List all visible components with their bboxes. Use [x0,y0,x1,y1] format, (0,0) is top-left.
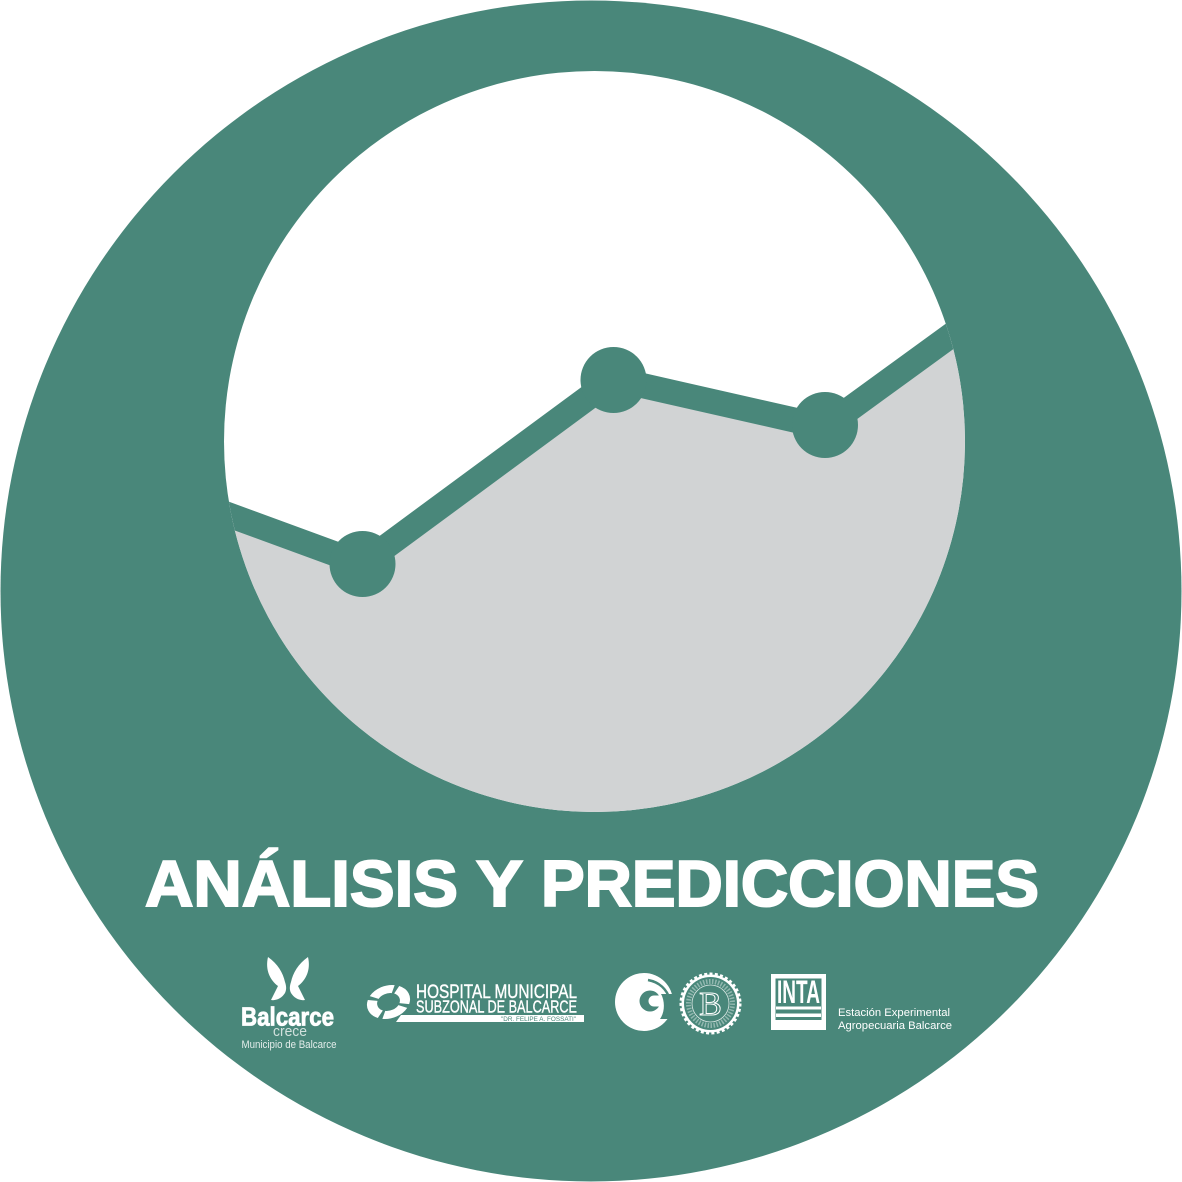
data point 3 [792,392,858,458]
INTA caption line 1: Estación Experimental [838,1007,950,1019]
icon: butterfly [267,957,309,1000]
title: PREDICCIONES [541,847,1039,920]
crece: crece [273,1023,307,1040]
logo: B seal [681,974,740,1033]
data point 2 [580,347,646,413]
INTA text: INTA [777,974,820,1010]
icon: hospital cross arrows [366,985,411,1019]
data point 1 [330,531,396,597]
logo: wave circle [615,973,676,1031]
logo: Hospital Municipal [366,982,584,1023]
title: ANÁLISIS [145,847,458,920]
underline bar [396,1015,584,1022]
municipality: Municipio de Balcarce [242,1039,336,1051]
chart line [229,324,954,566]
title [145,847,1039,920]
chart area fill [232,338,965,812]
panel: white inner circle [224,71,965,812]
hospital line 1: HOSPITAL MUNICIPAL [416,982,577,1003]
seal letter: B [699,986,722,1023]
INTA box [771,974,826,1030]
line chart [229,324,965,812]
hospital line 2: SUBZONAL DE BALCARCE [416,996,577,1016]
wordmark: Balcarce [241,1002,334,1032]
hospital line 3: "DR. FELIPE A. FOSSATI" [501,1016,577,1023]
crest line [648,980,670,1000]
title: Y [476,847,523,920]
curl [640,990,660,1012]
right cut [660,994,676,1019]
logo: Balcarce crece [241,957,336,1051]
INTA caption line 2: Agropecuaria Balcarce [838,1020,952,1032]
logo: INTA [771,974,952,1032]
